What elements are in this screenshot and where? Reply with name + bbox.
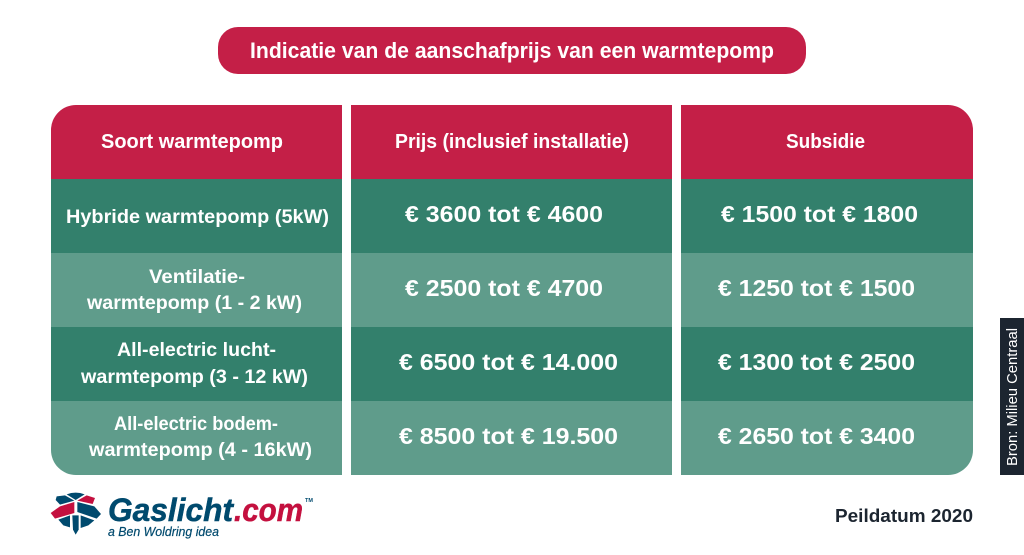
subsidy: hybride: € 1500 tot € 1800 <box>721 201 918 227</box>
header: subsidie <box>681 105 973 179</box>
row: all-electric lucht-warmtepomp: All-electric lucht- <box>117 339 276 361</box>
logo: Gaslicht.com: .com <box>234 492 303 528</box>
row: all-electric bodem-warmtepomp: All-electric bodem- <box>114 413 278 435</box>
title: Indicatie van de aanschafprijs van een warmtepomp <box>250 38 774 63</box>
row: all-electric bodem-warmtepomp: warmtepomp (4 - 16kW) <box>88 439 312 461</box>
subsidy: ventilatie <box>681 253 973 327</box>
row: all-electric lucht-warmtepomp <box>51 327 342 401</box>
source label: Bron: Milieu Centraal <box>1004 328 1021 466</box>
price: lucht <box>351 327 672 401</box>
price: bodem: € 8500 tot € 19.500 <box>399 423 618 449</box>
price: bodem <box>351 401 672 475</box>
row: all-electric bodem-warmtepomp <box>51 401 342 475</box>
header: prijs: Prijs (inclusief installatie) <box>395 131 629 153</box>
price: hybride <box>351 179 672 253</box>
icon: logo mark <box>51 493 101 535</box>
wordmark: Gaslicht <box>108 492 234 528</box>
logo: Gaslicht.com <box>51 492 313 539</box>
subsidy: bodem <box>681 401 973 475</box>
trademark: TM <box>305 498 313 504</box>
title <box>218 27 806 74</box>
price: hybride: € 3600 tot € 4600 <box>405 201 603 227</box>
price: lucht: € 6500 tot € 14.000 <box>399 349 618 375</box>
row: ventilatie-warmtepomp <box>51 253 342 327</box>
subsidy: lucht <box>681 327 973 401</box>
source label <box>1000 318 1024 475</box>
subsidy: ventilatie: € 1250 tot € 1500 <box>718 275 915 301</box>
subsidy: hybride <box>681 179 973 253</box>
header: soort warmtepomp <box>51 105 342 179</box>
reference date: Peildatum 2020 <box>835 506 973 526</box>
panel: soort warmtepomp column <box>51 105 342 475</box>
panel: prijs column <box>351 105 672 475</box>
subsidy: lucht: € 1300 tot € 2500 <box>718 349 915 375</box>
row: all-electric lucht-warmtepomp: warmtepomp (3 - 12 kW) <box>80 366 308 388</box>
row: ventilatie-warmtepomp: warmtepomp (1 - 2 kW) <box>86 292 302 314</box>
row: hybride warmtepomp <box>51 179 342 253</box>
row: hybride warmtepomp: Hybride warmtepomp (5kW) <box>66 206 329 228</box>
subsidy: bodem: € 2650 tot € 3400 <box>718 423 915 449</box>
header: prijs <box>351 105 672 179</box>
header: soort warmtepomp: Soort warmtepomp <box>101 131 283 153</box>
price: ventilatie: € 2500 tot € 4700 <box>405 275 603 301</box>
panel: subsidie column <box>681 105 973 475</box>
row: ventilatie-warmtepomp: Ventilatie- <box>149 266 245 288</box>
price: ventilatie <box>351 253 672 327</box>
header: subsidie: Subsidie <box>786 131 865 153</box>
tagline: a Ben Woldring idea <box>108 525 219 539</box>
